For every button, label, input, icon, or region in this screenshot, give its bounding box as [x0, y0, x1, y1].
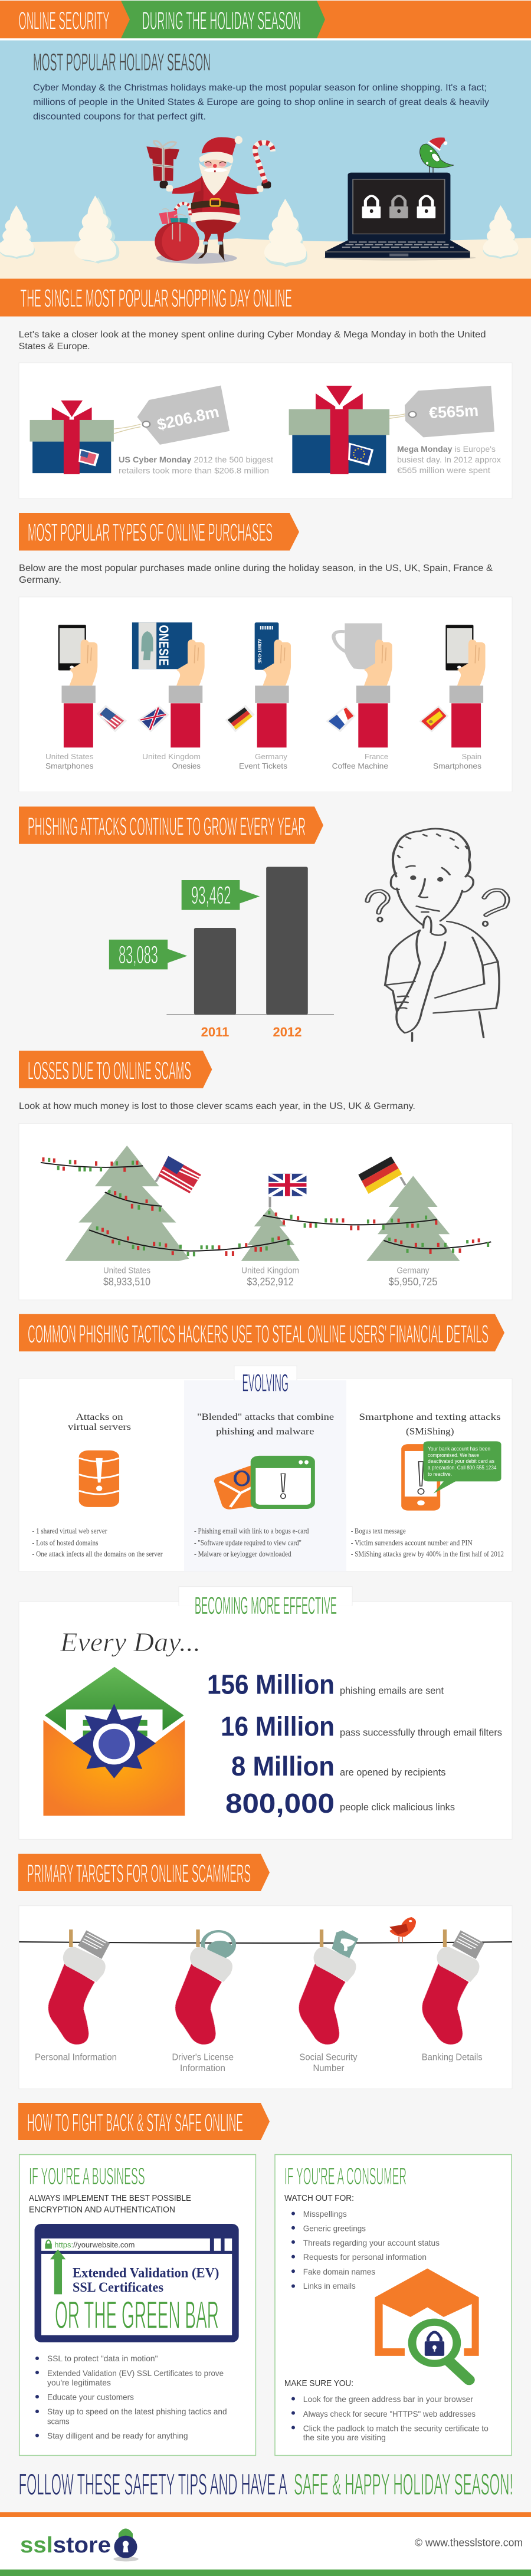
bubble text: Your bank account has been: [428, 1446, 490, 1452]
panel: purchases by country: [19, 597, 512, 792]
label on onesie: ONESIE: [156, 625, 171, 665]
list: business tips: [35, 2354, 227, 2440]
subheading: best encryption: [29, 2193, 191, 2214]
panel: primary targets: [19, 1906, 512, 2089]
list: watch out for: [291, 2209, 440, 2290]
list: smishing: - SMiShing attacks grew by 400% in the first half of 2012: [351, 1550, 504, 1558]
panel: if you're a business: OR THE GREEN BAR: [55, 2293, 219, 2337]
list: business tips: Educate your customers: [47, 2393, 134, 2402]
label: United States, Smartphones: United States: [45, 752, 94, 761]
gift: Europe: [289, 386, 494, 474]
column: virtual servers: [32, 1412, 163, 1558]
list: blended attacks: - Malware or keylogger downloaded: [194, 1550, 291, 1558]
list: watch out for: Links in emails: [303, 2281, 356, 2290]
label: personal information: Personal Information: [35, 2053, 117, 2063]
label: France, Coffee Machine: Coffee Machine: [332, 762, 388, 770]
label: Germany, Event Tickets: Germany: [255, 752, 288, 761]
banner: fight back: [18, 2103, 270, 2140]
christmas trees with lights and flags: [41, 1146, 491, 1261]
label: United States losses: $8,933,510: [103, 1276, 150, 1288]
icon: server warning: [79, 1451, 119, 1507]
label: France, Coffee Machine: [332, 752, 388, 770]
bubble text: a precaution. Call 800.555.1234: [428, 1465, 497, 1471]
list: business tips: Extended Validation (EV) SSL Certificates to prove: [47, 2368, 224, 2378]
label: Spain, Smartphones: [433, 752, 482, 770]
panel: holiday season scene: [0, 40, 531, 279]
losses intro text: Look at how much money is lost to those clever scams each year, in the US, UK & Germany.: [19, 1101, 415, 1111]
list: smishing: - Bogus text message: [351, 1527, 406, 1535]
hand: UK onesie: [132, 622, 205, 747]
bubble text: compromised. We have: [428, 1452, 479, 1459]
subheading: watch out for: WATCH OUT FOR:: [284, 2193, 354, 2203]
label: banking details: Banking Details: [422, 2053, 483, 2063]
column: blended attacks: "Blended" attacks that combine: [197, 1412, 334, 1422]
handwriting: every day: Every Day...: [60, 1627, 201, 1657]
list: make sure you: Click the padlock to match the security certificate to: [303, 2423, 489, 2433]
label: driver's license information: Information: [180, 2063, 225, 2073]
tab: evolving: [184, 1366, 346, 1571]
text: Mega Monday: Mega Monday is Europe's: [397, 444, 496, 454]
label: United Kingdom losses: United Kingdom: [241, 1266, 299, 1276]
list: business tips: SSL to protect "data in motion": [47, 2354, 158, 2363]
text: Mega Monday: €565 million were spent: [397, 465, 490, 475]
stockings on a line: [19, 1917, 512, 2045]
logo: ssl store: sslstore: [20, 2533, 111, 2558]
banner: losses due to scams: [19, 1051, 212, 1088]
label: Germany, Event Tickets: Event Tickets: [239, 762, 288, 770]
subheading: best encryption: ALWAYS IMPLEMENT THE BEST POSSIBLE: [29, 2193, 191, 2203]
list: blended attacks: - Phishing email with link to a bogus e-card: [194, 1527, 309, 1535]
hand: Spain smartphone: [419, 625, 486, 747]
shopping day intro text: [19, 330, 486, 352]
icon: phishing envelope: [43, 1667, 185, 1816]
panel: if you're a business: [19, 2155, 255, 2456]
list: smishing: [351, 1527, 504, 1558]
bubble text: to reactive.: [428, 1471, 452, 1478]
list: watch out for: Generic greetings: [303, 2223, 366, 2233]
year axis labels: 2011: [201, 1025, 229, 1039]
ev ssl text: [73, 2266, 219, 2295]
shopping day intro text: Let's take a closer look at the money spent online during Cyber Monday & Mega Monday in both the United: [19, 330, 486, 340]
list: business tips: Stay up to speed on the latest phishing tactics and: [47, 2407, 227, 2416]
label: United States, Smartphones: [45, 752, 94, 770]
bird with santa hat: [420, 137, 454, 173]
column: smishing: [351, 1412, 504, 1558]
banner: popular types of purchases: [19, 513, 299, 550]
list: blended attacks: - "Software update required to view card": [194, 1538, 301, 1547]
list: make sure you: Always check for secure "HTTPS" web addresses: [303, 2409, 476, 2419]
text: Mega Monday: busiest day. In 2012 approx: [397, 455, 501, 464]
bar chart: phishing attacks: [109, 867, 334, 1039]
stat: 8 million: are opened by recipients: [340, 1767, 446, 1778]
label: United States losses: United States: [103, 1266, 150, 1276]
laptop with padlocks: [323, 173, 476, 261]
stat: 16 million: [221, 1711, 502, 1742]
purchases intro text: Below are the most popular purchases made online during the holiday season, in the US, UK, Spain, France &: [19, 563, 493, 573]
banner: primary targets: [18, 1854, 270, 1891]
stat: 800,000: [225, 1788, 455, 1819]
list: watch out for: Misspellings: [303, 2209, 347, 2219]
label: Spain, Smartphones: Smartphones: [433, 762, 482, 770]
list: business tips: you're legitimates: [47, 2378, 111, 2387]
panel: money spent: [19, 363, 512, 498]
logo: ssl store: [20, 2528, 139, 2561]
tab: becoming more effective: [179, 1587, 352, 1619]
intro paragraph: discounted coupons for that perfect gift.: [33, 111, 206, 122]
panel: evolving tactics: [19, 1366, 512, 1571]
panel: losses by country: [19, 1123, 512, 1300]
list: smishing: - Victim surrenders account number and PIN: [351, 1538, 473, 1547]
label: United Kingdom, Onesies: United Kingdom: [142, 752, 201, 761]
column: virtual servers: Attacks on: [76, 1412, 123, 1422]
list: virtual servers: - 1 shared virtual web server: [32, 1527, 107, 1535]
label: driver's license information: [172, 2053, 234, 2073]
label: United States losses: [103, 1266, 150, 1288]
gift: US: [30, 385, 230, 474]
purchases intro text: Germany.: [19, 575, 61, 585]
illustration: thinking man: [368, 829, 507, 1041]
icon: phone with text bubble: [401, 1441, 502, 1511]
intro paragraph: millions of people in the United States & Europe are going to shop online in search of great deals & heavily: [33, 97, 489, 107]
banner: phishing attacks grow: [19, 806, 323, 844]
value 2011: 83,083: [119, 941, 158, 969]
bubble text: [428, 1446, 497, 1478]
stat: 800,000: people click malicious links: [340, 1801, 455, 1813]
address bar url: https://yourwebsite.com: [54, 2240, 135, 2249]
label: France, Coffee Machine: France: [365, 752, 388, 761]
list: blended attacks: [194, 1527, 309, 1558]
label: Spain, Smartphones: Spain: [461, 752, 481, 761]
panel: if you're a consumer: [275, 2155, 512, 2456]
stat: 8 million: 8 Million: [231, 1751, 335, 1781]
column: virtual servers: virtual servers: [68, 1422, 131, 1432]
bubble text: deactivated your debit card as: [428, 1458, 494, 1465]
hand: US smartphone: [58, 625, 127, 747]
list: make sure you: Look for the green address bar in your browser: [303, 2394, 473, 2404]
label: Germany losses: $5,950,725: [388, 1276, 438, 1288]
label: United States, Smartphones: Smartphones: [45, 762, 94, 770]
list: watch out for: Fake domain names: [303, 2267, 375, 2276]
shopping day intro text: States & Europe.: [19, 342, 90, 352]
price tag value: US: $206.8m: [156, 403, 221, 434]
list: virtual servers: [32, 1527, 163, 1558]
icon: email and browser warning: [214, 1456, 315, 1509]
panel: holiday season scene: MOST POPULAR HOLIDAY SEASON: [33, 48, 211, 76]
label: United Kingdom losses: [241, 1266, 299, 1288]
footer: [0, 2512, 531, 2576]
list: virtual servers: - One attack infects all the domains on the server: [32, 1550, 163, 1558]
list: make sure you: [291, 2394, 489, 2442]
label: Germany, Event Tickets: [239, 752, 288, 770]
icon: envelope with magnifier and padlock: [375, 2269, 479, 2380]
list: business tips: scams: [47, 2417, 70, 2426]
stat: 156 million: 156 Million: [207, 1669, 335, 1700]
santa with gift, candy cane and sack: [146, 136, 273, 264]
column: blended attacks: phishing and malware: [216, 1426, 314, 1437]
copyright: © www.thesslstore.com: [415, 2537, 523, 2549]
label: Germany losses: Germany: [396, 1266, 430, 1276]
ev ssl text: Extended Validation (EV): [73, 2266, 219, 2280]
stat: 800,000: 800,000: [225, 1788, 335, 1819]
label: driver's license information: Driver's License: [172, 2053, 234, 2063]
stat: 16 million: 16 Million: [221, 1711, 335, 1742]
title banner: ONLINE SECURITY: [19, 6, 110, 35]
label: United Kingdom, Onesies: Onesies: [172, 762, 201, 770]
purchases intro text: [19, 563, 493, 585]
list: make sure you: the site you are visiting: [303, 2433, 386, 2442]
text: US Cyber Monday: [119, 455, 273, 475]
year axis labels: [201, 1025, 301, 1039]
list: watch out for: Requests for personal information: [303, 2252, 427, 2262]
text: US Cyber Monday: US Cyber Monday 2012 the 500 biggest: [119, 455, 273, 464]
panel: becoming more effective: [19, 1587, 512, 1839]
stat: 16 million: pass successfully through email filters: [340, 1727, 502, 1738]
hand: France coffee mug: [326, 624, 392, 747]
intro paragraph: Cyber Monday & the Christmas holidays make-up the most popular season for online shopping. It's a fact;: [33, 83, 487, 93]
title banner: DURING THE HOLIDAY SEASON: [142, 6, 301, 35]
subheading: make sure you: MAKE SURE YOU:: [284, 2378, 353, 2388]
text: Mega Monday: [397, 444, 501, 475]
hand: Germany ticket: [225, 622, 291, 747]
ground and snowy trees: [0, 195, 531, 279]
value 2012: 93,462: [191, 881, 231, 910]
label on ticket: ADMIT·ONE: [257, 639, 262, 664]
column: blended attacks: [194, 1412, 334, 1558]
title banner: [0, 1, 531, 40]
text: US Cyber Monday: retailers took more than $206.8 million: [119, 466, 269, 475]
intro paragraph: [33, 83, 489, 122]
browser: green bar: [35, 2224, 239, 2342]
panel: if you're a business: IF YOU'RE A BUSINESS: [29, 2162, 145, 2190]
column: smishing: Smartphone and texting attacks: [359, 1412, 500, 1422]
label: social security number: [300, 2053, 358, 2073]
tab: evolving: EVOLVING: [242, 1369, 289, 1396]
label: social security number: Social Security: [300, 2053, 358, 2063]
year axis labels: 2012: [273, 1025, 301, 1039]
list: watch out for: Threats regarding your account status: [303, 2238, 440, 2247]
label: United Kingdom, Onesies: [142, 752, 201, 770]
stat: 156 million: phishing emails are sent: [340, 1685, 444, 1696]
subheading: best encryption: ENCRYPTION AND AUTHENTICATION: [29, 2204, 175, 2214]
text: LOSSES DUE TO ONLINE SCAMS: [28, 1056, 191, 1085]
stat: 156 million: [207, 1669, 444, 1700]
stat: 8 million: [231, 1751, 446, 1781]
column: smishing: (SMiShing): [406, 1426, 454, 1437]
label: Germany losses: [388, 1266, 438, 1288]
label: United Kingdom losses: $3,252,912: [247, 1276, 294, 1288]
list: business tips: Stay dilligent and be ready for anything: [47, 2431, 188, 2440]
list: virtual servers: - Lots of hosted domains: [32, 1538, 99, 1547]
price tag value: Europe: €565m: [428, 402, 479, 422]
ev ssl text: SSL Certificates: [73, 2280, 163, 2295]
label: social security number: Number: [313, 2063, 345, 2073]
